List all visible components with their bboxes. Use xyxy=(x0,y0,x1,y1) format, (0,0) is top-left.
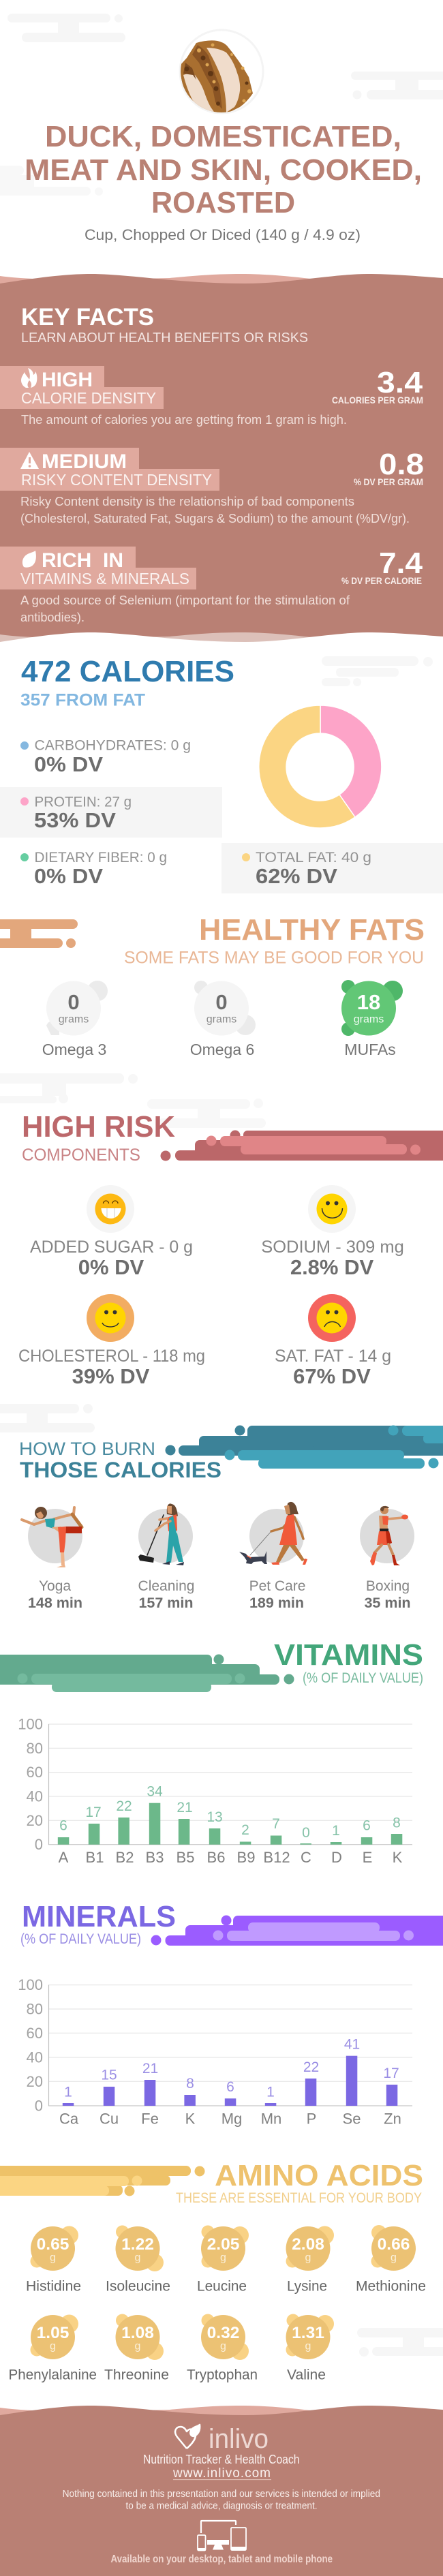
x axis labels: Fe xyxy=(141,2111,159,2128)
activity: yoga xyxy=(22,1507,82,1611)
stat: omega 3: grams xyxy=(59,1014,89,1025)
risk: added sugar: 0% DV xyxy=(78,1255,144,1279)
value labels: 21 xyxy=(142,2061,158,2076)
stat: MUFAs: grams xyxy=(354,1014,384,1025)
row: carbohydrates: CARBOHYDRATES: 0 g xyxy=(34,737,191,754)
icon: devices xyxy=(198,2521,246,2550)
y axis labels: 60 xyxy=(27,1764,43,1781)
risk: added sugar: ADDED SUGAR - 0 g xyxy=(30,1238,193,1257)
y axis labels: 80 xyxy=(27,1740,43,1757)
decorative blob: minerals xyxy=(151,1915,443,1946)
subheading: components: COMPONENTS xyxy=(22,1146,140,1165)
stat: MUFAs xyxy=(341,980,403,1058)
decorative blob: healthy fats xyxy=(0,919,78,948)
amino: methionine xyxy=(356,2225,426,2295)
fact: risky content density: 0.8 xyxy=(379,448,424,481)
y axis labels: 100 xyxy=(18,1716,43,1732)
amino: isoleucine: g xyxy=(135,2252,140,2264)
x axis labels xyxy=(59,2111,401,2128)
x axis labels: Cu xyxy=(100,2111,119,2128)
subheading: LEARN ABOUT HEALTH BENEFITS OR RISKS xyxy=(21,331,308,346)
activity: boxing: 35 min xyxy=(364,1595,411,1611)
amino: isoleucine: Isoleucine xyxy=(106,2279,170,2295)
tagline: Nutrition Tracker & Health Coach xyxy=(143,2452,300,2466)
y axis labels: 0 xyxy=(35,1836,43,1853)
subheading: minerals daily value: (% OF DAILY VALUE) xyxy=(20,1931,141,1947)
icon: frowning face xyxy=(316,1303,348,1333)
x axis labels: B9 xyxy=(237,1849,255,1866)
x axis labels: Se xyxy=(343,2111,361,2128)
amino: leucine xyxy=(197,2226,249,2295)
value labels: 6 xyxy=(59,1818,67,1834)
amino: phenylalanine: Phenylalanine xyxy=(8,2367,97,2383)
amino: lysine: g xyxy=(305,2252,311,2264)
risk: saturated fat: 67% DV xyxy=(293,1364,371,1388)
amino: histidine: g xyxy=(50,2252,56,2264)
risk: sodium: 2.8% DV xyxy=(290,1255,373,1279)
website link: www.inlivo.com xyxy=(172,2466,271,2481)
icon: dog walker figure xyxy=(239,1502,307,1565)
fact: calorie density: CALORIES PER GRAM xyxy=(332,395,423,405)
row: dietary fiber: 0% DV xyxy=(34,864,103,888)
value labels xyxy=(59,1784,401,1841)
amino: leucine: g xyxy=(220,2252,226,2264)
x axis labels: C xyxy=(301,1849,311,1866)
stat: omega 6: grams xyxy=(207,1014,236,1025)
amino: lysine: Lysine xyxy=(287,2279,327,2295)
x axis labels: B6 xyxy=(207,1849,225,1866)
risk: saturated fat: SAT. FAT - 14 g xyxy=(275,1347,391,1366)
subheading: calories from fat: 357 FROM FAT xyxy=(20,691,145,710)
activity: cleaning: 157 min xyxy=(138,1595,194,1611)
amino: tryptophan xyxy=(187,2314,258,2383)
value labels: 7 xyxy=(272,1816,280,1832)
icon: leaf xyxy=(22,551,36,568)
amino: lysine: 2.08 xyxy=(292,2235,324,2254)
amino: isoleucine xyxy=(106,2226,170,2295)
y axis labels: 40 xyxy=(27,1788,43,1805)
icon: yoga figure xyxy=(22,1507,82,1567)
amino: valine: g xyxy=(305,2341,311,2352)
value labels: 15 xyxy=(101,2068,117,2083)
fact: risky content density: % DV PER GRAM xyxy=(354,476,423,487)
stat: omega 6: Omega 6 xyxy=(190,1041,254,1058)
risk: cholesterol: 39% DV xyxy=(72,1364,150,1388)
x axis labels: P xyxy=(307,2111,316,2128)
y axis labels xyxy=(18,1976,43,2114)
amino: threonine: Threonine xyxy=(104,2367,169,2383)
decorative blob: high risk xyxy=(161,1130,443,1161)
heading: healthy fats: HEALTHY FATS xyxy=(199,913,425,947)
value labels: 13 xyxy=(207,1809,223,1825)
subheading: healthy fats: SOME FATS MAY BE GOOD FOR YOU xyxy=(124,949,424,968)
amino: methionine: Methionine xyxy=(356,2279,426,2295)
x axis labels: E xyxy=(363,1849,372,1866)
amino: methionine: 0.66 xyxy=(378,2235,410,2254)
risk: sodium: SODIUM - 309 mg xyxy=(261,1238,404,1257)
value labels: 22 xyxy=(116,1798,132,1814)
panel: key facts xyxy=(0,274,443,647)
heading: calories: 472 CALORIES xyxy=(21,655,234,688)
serving size subtitle: Cup, Chopped Or Diced (140 g / 4.9 oz) xyxy=(85,226,361,243)
x axis labels: Zn xyxy=(384,2111,401,2128)
x axis labels: A xyxy=(59,1849,69,1866)
icon: inlivo heart logo xyxy=(175,2425,200,2449)
x axis labels: Mg xyxy=(222,2111,242,2128)
y axis labels xyxy=(18,1716,43,1853)
heading: amino acids: AMINO ACIDS xyxy=(215,2159,423,2192)
bar chart: minerals xyxy=(18,1976,412,2128)
food photo: roasted duck slices xyxy=(180,30,263,114)
decorative blob: vitamins xyxy=(0,1655,294,1692)
decorative blob: amino acids xyxy=(0,2166,204,2196)
amino: threonine xyxy=(104,2314,169,2383)
x axis labels: K xyxy=(393,1849,403,1866)
x axis labels xyxy=(59,1849,403,1866)
y axis labels: 0 xyxy=(35,2098,43,2114)
fact: risky content density: MEDIUM xyxy=(42,450,127,473)
activity: cleaning xyxy=(138,1503,194,1611)
heading: high risk: HIGH RISK xyxy=(22,1110,175,1144)
row: carbohydrates: 0% DV xyxy=(34,752,103,776)
x axis labels: B1 xyxy=(86,1849,104,1866)
title: ROASTED xyxy=(151,186,295,219)
macronutrient rows xyxy=(0,737,443,893)
amino: threonine: g xyxy=(135,2341,140,2352)
amino: histidine xyxy=(26,2226,81,2295)
value labels: 17 xyxy=(85,1805,102,1820)
icon: cleaning figure xyxy=(138,1503,184,1565)
row: dietary fiber: DIETARY FIBER: 0 g xyxy=(34,850,167,865)
stat: MUFAs: 18 xyxy=(357,990,380,1014)
amino: tryptophan: 0.32 xyxy=(207,2324,239,2342)
background cloud: amino acids xyxy=(357,2328,443,2357)
row: total fat xyxy=(222,843,443,893)
stat: omega 6 xyxy=(190,981,256,1058)
fact: vitamins and minerals: 7.4 xyxy=(379,547,423,580)
background cloud: burn section xyxy=(0,1404,95,1432)
x axis labels: B5 xyxy=(177,1849,194,1866)
fact: risky content density: (Cholesterol, Saturated Fat, Sugars & Sodium) to the amount (%DV/gr). xyxy=(20,512,410,525)
amino: valine: Valine xyxy=(287,2367,326,2383)
activity: yoga: 148 min xyxy=(28,1595,82,1611)
amino: threonine: 1.08 xyxy=(121,2324,154,2342)
value labels: 34 xyxy=(147,1784,163,1800)
fact: vitamins and minerals: RICH IN xyxy=(42,549,123,572)
value labels: 1 xyxy=(64,2085,72,2100)
bar chart: vitamins xyxy=(18,1716,412,1866)
bars xyxy=(63,2056,397,2106)
heading: minerals: MINERALS xyxy=(22,1900,176,1933)
heading: vitamins: VITAMINS xyxy=(274,1638,423,1672)
x axis labels: B12 xyxy=(263,1849,290,1866)
row: protein xyxy=(0,787,222,838)
activity: pet care: 189 min xyxy=(249,1595,304,1611)
amino: methionine: g xyxy=(391,2252,397,2264)
heading: those calories: THOSE CALORIES xyxy=(20,1458,222,1482)
value labels: 6 xyxy=(226,2079,234,2095)
fact: risky content density xyxy=(0,448,424,525)
background cloud: top left xyxy=(7,14,125,42)
title xyxy=(25,120,422,219)
heading: how to burn: HOW TO BURN xyxy=(19,1439,155,1459)
value labels: 6 xyxy=(363,1818,371,1834)
amino: tryptophan: g xyxy=(220,2341,226,2352)
y axis labels: 60 xyxy=(27,2025,43,2042)
amino: tryptophan: Tryptophan xyxy=(187,2367,258,2383)
icon: flame xyxy=(21,368,37,388)
background cloud: high risk left xyxy=(0,1073,138,1103)
value labels: 21 xyxy=(177,1800,193,1815)
value labels: 1 xyxy=(266,2085,275,2100)
x axis labels: D xyxy=(331,1849,342,1866)
value labels: 17 xyxy=(383,2066,399,2081)
wave: bottom of key facts xyxy=(0,632,443,645)
stat: omega 3 xyxy=(42,981,108,1058)
amino: phenylalanine xyxy=(8,2314,97,2383)
risk: sodium xyxy=(261,1185,404,1279)
activity: boxing xyxy=(360,1506,414,1611)
panel: footer xyxy=(0,2406,443,2576)
value labels: 22 xyxy=(303,2059,319,2075)
stat: omega 6: 0 xyxy=(215,990,228,1014)
amino: phenylalanine: 1.05 xyxy=(37,2324,69,2342)
risk: saturated fat xyxy=(275,1294,391,1388)
gridlines and axis xyxy=(48,1724,412,1845)
wave: top of key facts xyxy=(0,274,443,286)
icon: warning triangle xyxy=(20,452,39,469)
fact: calorie density xyxy=(0,366,423,427)
y axis labels: 20 xyxy=(27,2073,43,2090)
fact: calorie density: CALORIE DENSITY xyxy=(21,389,156,407)
stat: omega 3: 0 xyxy=(67,990,80,1014)
x axis labels: B3 xyxy=(146,1849,164,1866)
heading: key facts: KEY FACTS xyxy=(21,304,154,331)
y axis labels: 80 xyxy=(27,2001,43,2017)
amino: leucine: Leucine xyxy=(197,2279,247,2295)
disclaimer: to be a medical advice, diagnosis or treatment. xyxy=(125,2500,318,2512)
activity: yoga: Yoga xyxy=(39,1578,71,1594)
icon: slightly smiling face xyxy=(95,1303,125,1333)
decorative blob: burn calories xyxy=(165,1426,443,1469)
amino: isoleucine: 1.22 xyxy=(121,2235,154,2254)
icon: boxer figure xyxy=(370,1506,408,1565)
x axis labels: K xyxy=(185,2111,196,2128)
fact: vitamins and minerals: % DV PER CALORIE xyxy=(341,575,422,586)
fact: calorie density: 3.4 xyxy=(377,366,423,399)
value labels: 0 xyxy=(302,1825,310,1841)
value labels: 41 xyxy=(344,2037,360,2053)
icon: smiling face xyxy=(316,1194,348,1224)
value labels: 1 xyxy=(332,1823,340,1839)
fact: vitamins and minerals: antibodies). xyxy=(20,611,85,624)
amino: lysine xyxy=(286,2226,334,2295)
row: dietary fiber xyxy=(20,850,167,888)
amino: valine xyxy=(286,2314,334,2383)
activity: pet care xyxy=(239,1502,307,1611)
amino: valine: 1.31 xyxy=(292,2324,324,2342)
title: MEAT AND SKIN, COOKED, xyxy=(25,153,422,187)
amino: phenylalanine: g xyxy=(50,2341,56,2352)
activity: cleaning: Cleaning xyxy=(138,1578,194,1594)
fact: calorie density: HIGH xyxy=(42,369,93,391)
row: total fat: 62% DV xyxy=(256,864,337,888)
amino: histidine: Histidine xyxy=(26,2279,81,2295)
x axis labels: B2 xyxy=(116,1849,134,1866)
fact: vitamins and minerals: A good source of Selenium (important for the stimulation of xyxy=(20,594,350,607)
gridlines and axis xyxy=(48,1985,412,2106)
x axis labels: Ca xyxy=(59,2111,79,2128)
availability note: Available on your desktop, tablet and mobile phone xyxy=(110,2554,333,2565)
y axis labels: 40 xyxy=(27,2049,43,2066)
row: carbohydrates xyxy=(20,737,191,776)
stat: omega 3: Omega 3 xyxy=(42,1041,106,1058)
icon: grinning face xyxy=(95,1194,125,1224)
risk: cholesterol: CHOLESTEROL - 118 mg xyxy=(18,1347,205,1366)
y axis labels: 100 xyxy=(18,1976,43,1993)
fact: risky content density: Risky Content density is the relationship of bad components xyxy=(20,495,354,508)
risk: added sugar xyxy=(30,1185,193,1279)
background cloud: calories xyxy=(322,656,433,686)
disclaimer: Nothing contained in this presentation and our services is intended or implied xyxy=(63,2488,380,2500)
fact: vitamins and minerals: VITAMINS & MINERALS xyxy=(20,570,189,587)
row: total fat: TOTAL FAT: 40 g xyxy=(256,850,371,865)
donut chart xyxy=(259,705,382,828)
activity: pet care: Pet Care xyxy=(249,1578,305,1594)
logo wordmark: inlivo xyxy=(209,2424,269,2454)
background cloud: behind title xyxy=(0,166,103,196)
background cloud: top right xyxy=(351,72,443,99)
bars xyxy=(58,1803,402,1845)
title: DUCK, DOMESTICATED, xyxy=(45,120,401,153)
fact: vitamins and minerals xyxy=(0,547,423,624)
wave: top of footer xyxy=(0,2406,443,2418)
disclaimer xyxy=(63,2488,380,2512)
value labels: 2 xyxy=(241,1822,249,1838)
risk: cholesterol xyxy=(18,1294,205,1388)
y axis labels: 20 xyxy=(27,1812,43,1829)
row: protein: PROTEIN: 27 g xyxy=(34,795,132,810)
background cloud: high risk right xyxy=(147,1099,266,1128)
stat: MUFAs: MUFAs xyxy=(344,1041,396,1058)
x axis labels: Mn xyxy=(261,2111,281,2128)
amino: histidine: 0.65 xyxy=(37,2235,69,2254)
fact: calorie density: The amount of calories you are getting from 1 gram is high. xyxy=(21,413,347,427)
value labels: 8 xyxy=(186,2076,194,2091)
activity: boxing: Boxing xyxy=(366,1578,410,1594)
value labels xyxy=(64,2037,399,2100)
row: protein: 53% DV xyxy=(34,808,116,832)
amino: leucine: 2.05 xyxy=(207,2235,239,2254)
subheading: vitamins daily value: (% OF DAILY VALUE) xyxy=(303,1670,423,1686)
fact: risky content density: RISKY CONTENT DENSITY xyxy=(21,471,212,489)
value labels: 8 xyxy=(393,1815,401,1831)
